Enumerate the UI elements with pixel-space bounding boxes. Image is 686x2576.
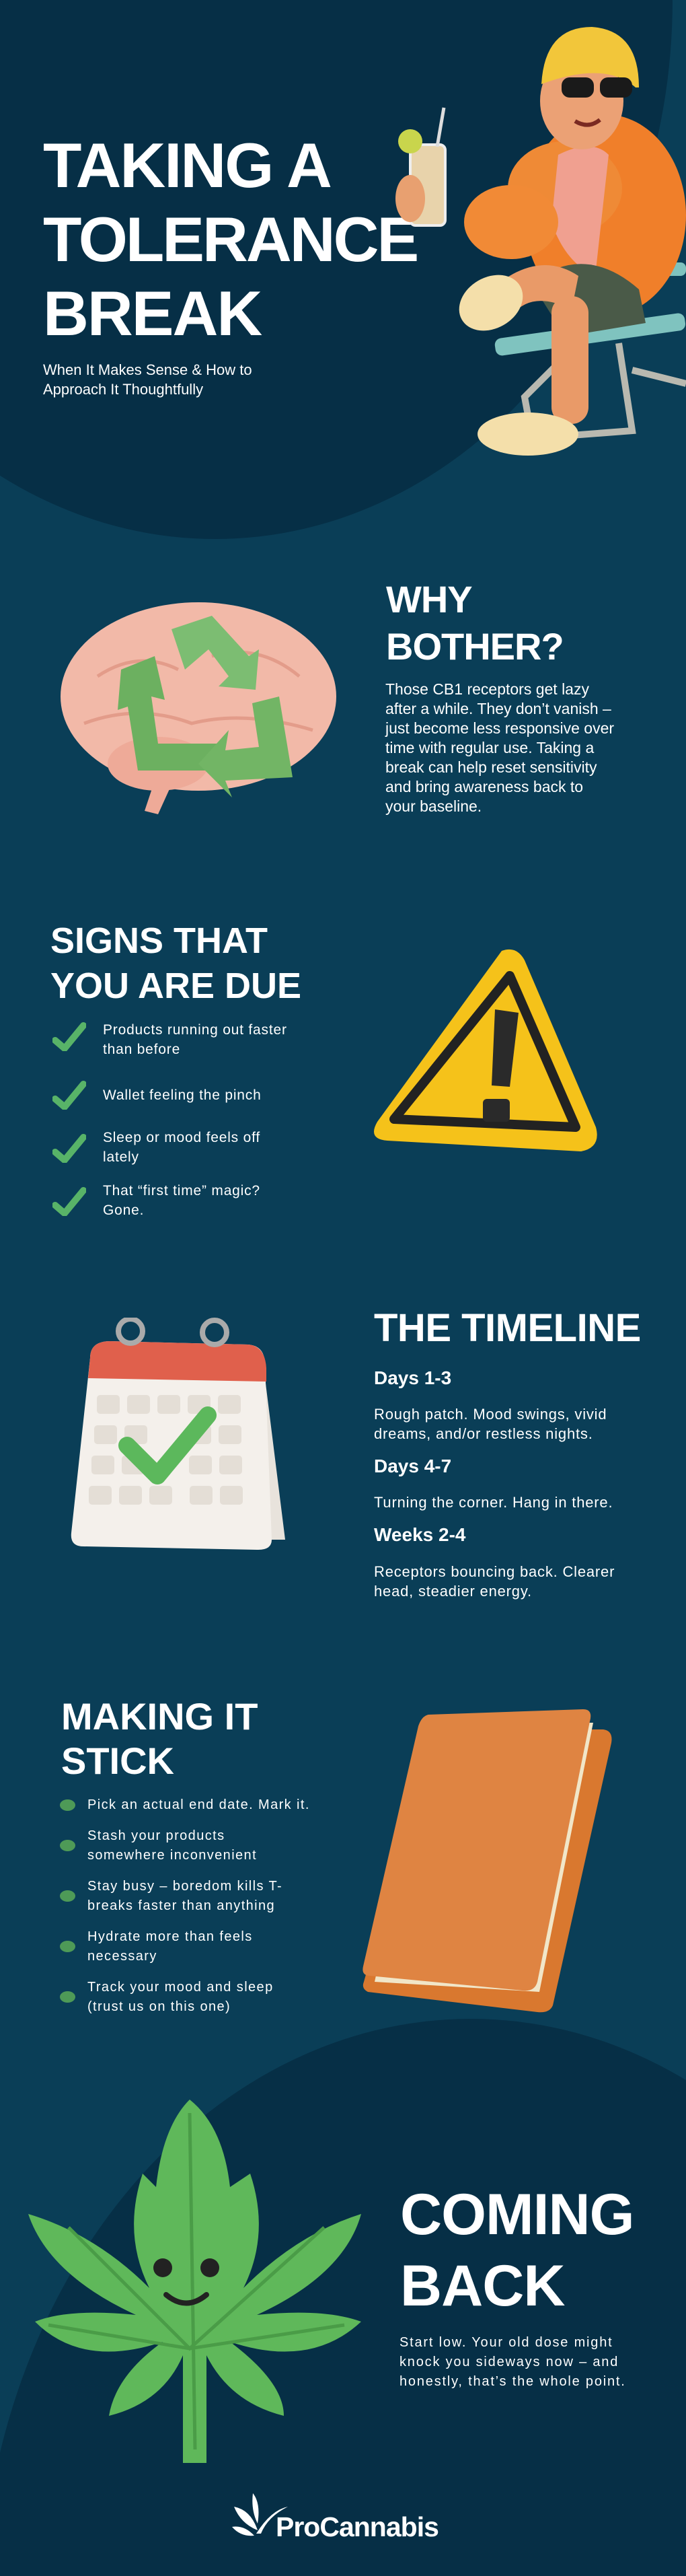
logo: ProCannabis: ProCannabis (276, 2511, 439, 2542)
bullet item 2: Stash your products (87, 1828, 225, 1843)
item: products (52, 1022, 287, 1057)
text: why bother body (385, 680, 614, 815)
item: magic (52, 1183, 260, 1218)
timeline: days 4-7 (374, 1456, 613, 1511)
list: signs (52, 1022, 287, 1218)
timeline: days 1-3: Days 1-3 (374, 1367, 451, 1388)
icon: brain with recycle arrows (61, 602, 336, 814)
item: sleep: lately (103, 1149, 139, 1165)
heading: signs that you are due (50, 921, 301, 1006)
icon: calendar (71, 1318, 285, 1550)
heading: why bother: WHY (386, 578, 472, 620)
bullet item 5 (60, 1980, 274, 2014)
item: sleep (52, 1130, 260, 1165)
bullet item 3: breaks faster than anything (87, 1898, 275, 1913)
text: coming back body: knock you sideways now – and (399, 2355, 619, 2369)
text: why bother body: Those CB1 receptors get lazy (385, 680, 589, 698)
heading: making it stick: MAKING IT (61, 1695, 258, 1738)
heading: coming back: COMING (400, 2182, 634, 2247)
title (43, 130, 417, 349)
timeline: weeks 2-4: head, steadier energy. (374, 1583, 532, 1600)
text: why bother body: time with regular use. Taking a (385, 739, 594, 756)
heading: coming back: BACK (400, 2254, 564, 2318)
text: coming back body: Start low. Your old dose might (399, 2335, 613, 2350)
heading: making it stick (61, 1695, 258, 1782)
logo: ProCannabis (232, 2493, 439, 2542)
title: TAKING A (43, 130, 331, 201)
subtitle (43, 361, 252, 398)
text: coming back body: honestly, that’s the whole point. (399, 2374, 626, 2389)
item: sleep: Sleep or mood feels off (103, 1130, 260, 1145)
timeline: weeks 2-4 (374, 1524, 615, 1600)
item: magic: That “first time” magic? (103, 1183, 260, 1198)
bullet item 1: Pick an actual end date. Mark it. (87, 1797, 310, 1812)
bullet item 4: necessary (87, 1949, 157, 1964)
timeline: days 4-7: Days 4-7 (374, 1456, 451, 1476)
icon: warning triangle (374, 949, 597, 1151)
item: magic: Gone. (103, 1203, 144, 1218)
list: making it stick (60, 1797, 310, 2014)
timeline: days 4-7: Turning the corner. Hang in there. (374, 1494, 613, 1511)
item: products: Products running out faster (103, 1022, 287, 1038)
timeline: weeks 2-4: Receptors bouncing back. Clearer (374, 1563, 615, 1580)
text: why bother body: break can help reset sensitivity (385, 758, 597, 776)
subtitle: Approach It Thoughtfully (43, 381, 203, 398)
item: wallet (52, 1081, 262, 1110)
heading: signs that you are due: SIGNS THAT (50, 921, 268, 961)
heading: why bother (386, 578, 564, 668)
heading: signs that you are due: YOU ARE DUE (50, 966, 301, 1006)
bullet item 3: Stay busy – boredom kills T- (87, 1879, 282, 1894)
icon: notebook (363, 1709, 612, 2012)
heading: making it stick: STICK (61, 1740, 174, 1782)
timeline: weeks 2-4: Weeks 2-4 (374, 1524, 465, 1545)
timeline: days 1-3 (374, 1367, 607, 1442)
item: products: than before (103, 1042, 180, 1057)
text: why bother body: after a while. They don’t vanish – (385, 700, 611, 717)
bullet item 4: Hydrate more than feels (87, 1929, 253, 1944)
bullet item 5: (trust us on this one) (87, 1999, 231, 2014)
timeline: days 1-3: Rough patch. Mood swings, vivid (374, 1406, 607, 1423)
subtitle: When It Makes Sense & How to (43, 361, 252, 378)
text: why bother body: and bring awareness back to (385, 778, 583, 795)
bullet item 3 (60, 1879, 282, 1913)
bullet item 2 (60, 1828, 257, 1863)
title: BREAK (43, 278, 261, 349)
text: why bother body: just become less responsive over (385, 719, 614, 737)
text: why bother body: your baseline. (385, 797, 482, 815)
text: coming back body (399, 2335, 626, 2389)
bullet item 5: Track your mood and sleep (87, 1980, 274, 1995)
heading: why bother: BOTHER? (386, 625, 564, 668)
icon: smiling cannabis leaf (28, 2100, 361, 2463)
bullet item 4 (60, 1929, 253, 1964)
title: TOLERANCE (43, 204, 417, 275)
timeline: days 1-3: dreams, and/or restless nights. (374, 1425, 593, 1442)
heading: coming back (400, 2182, 634, 2318)
bullet item 2: somewhere inconvenient (87, 1848, 257, 1863)
illustration: man in beach chair (395, 27, 686, 456)
item: wallet: Wallet feeling the pinch (103, 1087, 262, 1103)
heading: the timeline: THE TIMELINE (374, 1306, 641, 1350)
